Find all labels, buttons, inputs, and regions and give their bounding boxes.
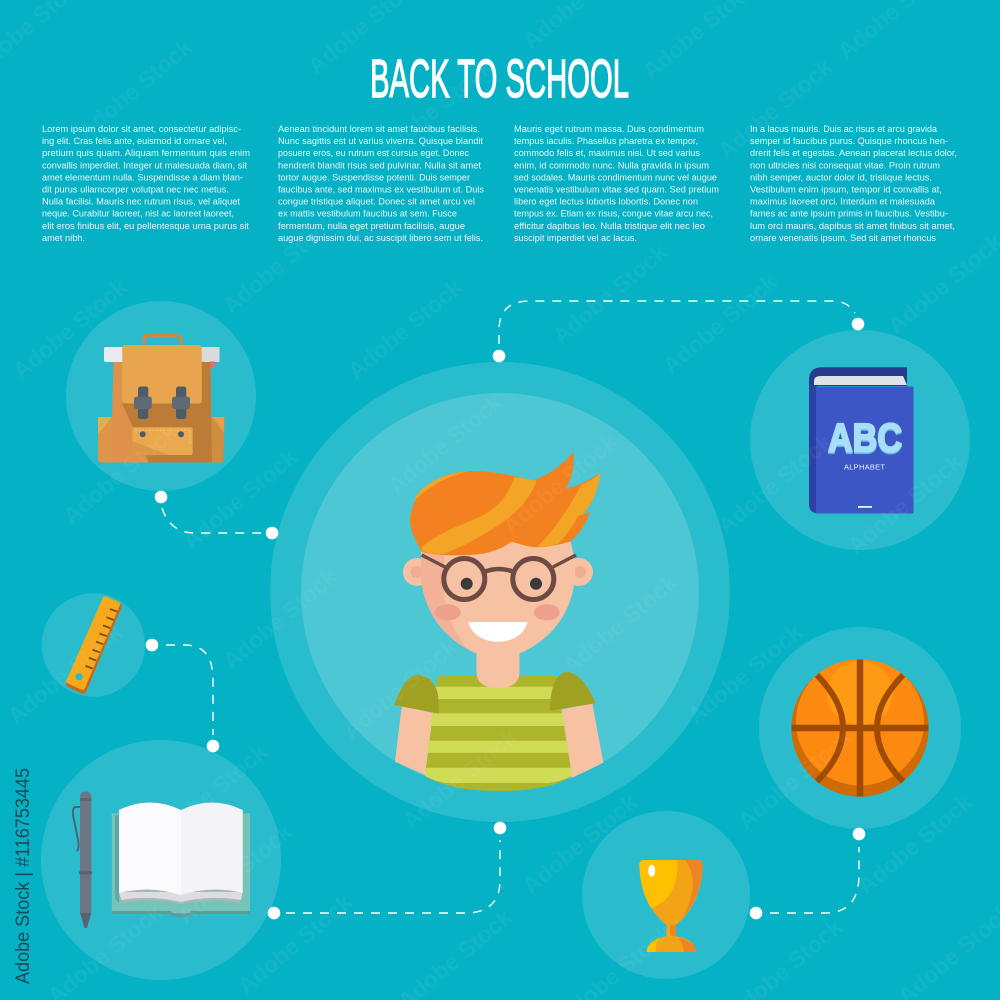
watermark text: Adobe Stock xyxy=(713,429,837,539)
watermark text: Adobe Stock xyxy=(853,789,977,899)
stock id label: Adobe Stock | #116753445 xyxy=(13,768,34,984)
text block: column 2: hendrerit blandit risus sed pulvinar. Nulla sit amet xyxy=(278,160,481,171)
text block: column 3: efficitur dapibus leo. Nulla tristique elit nec leo xyxy=(514,221,705,232)
watermark text: Adobe Stock xyxy=(8,274,132,384)
alphabet book circle with icon xyxy=(750,330,970,550)
text block: column 1: pretium quis quam. Aliquam fermentum quis enim xyxy=(42,148,250,159)
text block: column 3: commodo felis et, maximus nisi. Ut sed varius xyxy=(514,148,700,159)
watermark text: Adobe Stock xyxy=(658,269,782,379)
text block: column 3: enim, id commodo nunc. Nulla gravida in ipsum xyxy=(514,160,709,171)
watermark text: Adobe Stock xyxy=(733,724,857,834)
text block: column 1: ing elit. Cras felis ante, euismod id ornare vel, xyxy=(42,136,227,147)
connector: trophy to basketball xyxy=(750,828,865,919)
text block: column 1: amet nibh. xyxy=(42,233,85,244)
text block: column 4: In a lacus mauris. Duis ac risus et arcu gravida xyxy=(750,124,938,135)
watermark text: Adobe Stock xyxy=(558,569,682,679)
text block: column 4: non ultricies nisi consequat vitae. Proin rutrum xyxy=(750,160,940,171)
trophy circle with icon xyxy=(582,811,750,979)
watermark text: Adobe Stock xyxy=(843,449,967,559)
text block: column 4: ornare venenatis ipsum. Sed sit amet rhoncus xyxy=(750,233,936,244)
hair xyxy=(410,452,601,555)
watermark text: Adobe Stock xyxy=(3,619,127,729)
icon: open book xyxy=(112,802,250,917)
watermark text: Adobe Stock xyxy=(548,239,672,349)
watermark text: Adobe Stock xyxy=(683,619,807,729)
text block: column 4: maximus laoreet orci. Interdum et malesuada xyxy=(750,197,936,208)
text block: column 1: Nulla facilisi. Mauris nec rutrum risus, vel aliquet xyxy=(42,197,240,208)
watermark text: Adobe Stock xyxy=(178,444,302,554)
watermark text: Adobe Stock xyxy=(338,634,462,744)
text block: column 1: dit purus ullamcorper volutpat nec nec metus. xyxy=(42,184,229,196)
icon: pen xyxy=(73,792,92,928)
text block: column 3: suscipit imperdiet vel ac lacus. xyxy=(514,233,637,244)
watermark text: Adobe Stock xyxy=(173,819,297,929)
text block: column 1: Lorem ipsum dolor sit amet, consectetur adipisc- xyxy=(42,124,241,135)
watermark text: Adobe Stock xyxy=(73,34,197,144)
ruler circle with icon xyxy=(42,593,145,697)
watermark text: Adobe Stock xyxy=(398,724,522,834)
text block: column 2: ex mattis vestibulum faucibus at sem. Fusce xyxy=(278,209,457,220)
icon: alphabet book: ABC xyxy=(828,418,902,462)
text block: column 4: Vestibulum enim ipsum, tempor id convallis at, xyxy=(750,184,942,196)
text block: column 3 xyxy=(514,124,719,244)
icon: alphabet book: ALPHABET xyxy=(844,462,885,472)
cheeks xyxy=(435,604,560,620)
connector: backpack to character xyxy=(155,491,278,539)
text block: column 1 xyxy=(42,124,250,244)
watermark text: Adobe Stock xyxy=(518,789,642,899)
icon: basketball xyxy=(791,658,929,797)
basketball circle with icon xyxy=(759,627,961,829)
text block: column 4: fames ac ante ipsum primis in faucibus. Vestibu- xyxy=(750,209,948,220)
watermark text: Adobe Stock xyxy=(218,209,342,319)
connector: open book to character xyxy=(268,822,506,919)
text block: column 3: libero eget lectus lobortis lobortis. Donec non xyxy=(514,197,698,208)
neck xyxy=(476,645,520,688)
connector: ruler to open book xyxy=(146,639,219,752)
character: boy with glasses xyxy=(394,452,603,791)
icon: alphabet book: ABC xyxy=(828,416,902,460)
text block: column 2: Aenean tincidunt lorem sit amet faucibus facilisis. xyxy=(278,124,480,135)
text block: column 3: venenatis vestibulum vitae sed quam. Sed pretium xyxy=(514,184,719,196)
text block: column 2: augue dignissim dui, ac suscipit libero sem ut felis. xyxy=(278,233,483,244)
open book and pen circle with icons xyxy=(41,740,281,980)
text block: column 2: congue tristique aliquet. Donec sit amet arcu vel xyxy=(278,197,475,208)
face xyxy=(421,541,575,654)
watermark text: Adobe Stock xyxy=(373,54,497,164)
title: BACK TO SCHOOL xyxy=(370,49,629,109)
text block: column 3: Mauris eget rutrum massa. Duis condimentum xyxy=(514,124,704,135)
text block: column 2: Nunc sagittis est ut varius viverra. Quisque blandit xyxy=(278,136,483,147)
watermark text: Adobe Stock xyxy=(498,429,622,539)
watermark text: Adobe Stock xyxy=(713,54,837,164)
text block: column 3: tempus iaculis. Phasellus pharetra ex tempor, xyxy=(514,136,698,147)
text block: column 1: elit eros finibus elit, eu pellentesque urna purus sit xyxy=(42,221,249,232)
text block: column 4: semper id faucibus purus. Quisque rhoncus hen- xyxy=(750,136,948,147)
arms xyxy=(395,703,603,778)
text block: column 2: faucibus ante, sed maximus ex vestibulum ut. Duis xyxy=(278,184,484,196)
smile xyxy=(468,622,528,642)
text block: column 2: posuere eros, eu rutrum est cursus eget. Donec xyxy=(278,148,469,159)
text block: column 4 xyxy=(750,124,957,244)
text block: column 2 xyxy=(278,124,484,244)
eyes xyxy=(461,578,542,590)
connector: character to alphabet book xyxy=(493,301,864,362)
text block: column 1: amet elementum nulla. Suspendisse a diam blan- xyxy=(42,172,243,183)
watermark text: Adobe Stock xyxy=(148,739,272,849)
icon: alphabet book xyxy=(809,367,914,514)
striped shirt xyxy=(425,675,572,791)
text block: column 4: lum orci mauris, dapibus sit amet finibus sit amet, xyxy=(750,221,955,232)
watermark text: Adobe Stock xyxy=(343,274,467,384)
watermark text: Adobe Stock xyxy=(233,889,357,999)
watermark text: Adobe Stock xyxy=(383,389,507,499)
central character circles xyxy=(270,362,730,822)
icon: trophy xyxy=(639,860,703,952)
watermark text: Adobe Stock xyxy=(218,564,342,674)
icon: ruler xyxy=(66,596,122,694)
text block: column 2: tortor augue. Suspendisse potenti. Duis semper xyxy=(278,172,471,183)
text block: column 2: fermentum, nulla eget pretium facilisis, augue xyxy=(278,221,465,232)
glasses xyxy=(422,555,576,600)
text block: column 4: drerit felis et egestas. Aenean placerat lectus dolor, xyxy=(750,148,957,159)
text block: column 1: neque. Curabitur laoreet, nisl ac laoreet laoreet, xyxy=(42,209,234,220)
icon: backpack xyxy=(98,336,224,462)
backpack circle with icon xyxy=(66,301,256,491)
text block: column 3: tempus ex. Etiam ex risus, congue vitae arcu nec, xyxy=(514,209,713,220)
text block: column 1: convallis imperdiet. Integer ut malesuada diam, sit xyxy=(42,160,247,171)
watermark text: Adobe Stock xyxy=(58,419,182,529)
text block: column 4: nibh semper, auctor dolor id, tristique lectus. xyxy=(750,172,932,183)
ears xyxy=(403,558,593,586)
text block: column 3: sed sodales. Mauris condimentum nunc vel augue xyxy=(514,172,717,183)
sleeves xyxy=(394,672,596,714)
